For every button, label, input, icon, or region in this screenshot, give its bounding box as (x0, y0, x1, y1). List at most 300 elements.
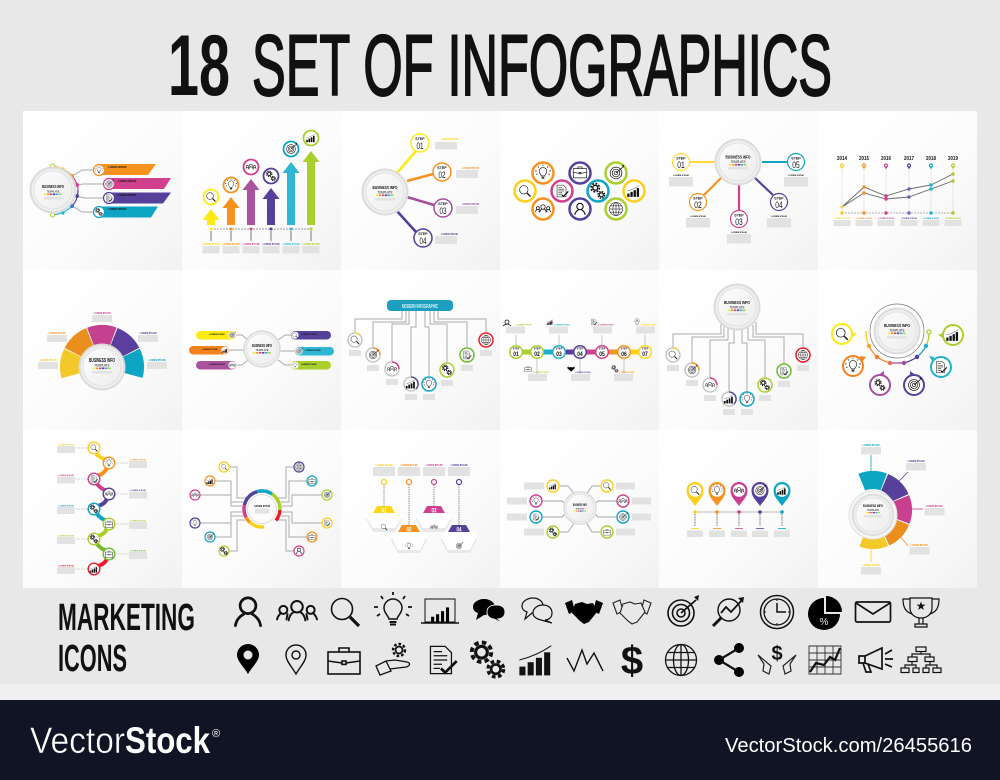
icon: grid chart (809, 646, 841, 674)
step 07: STEP (642, 348, 649, 350)
center disc with ring: TEMPLATE (890, 328, 904, 332)
icon: zigzag line (567, 650, 603, 671)
icon: outline handshake (613, 600, 651, 624)
icon: clock (760, 596, 794, 628)
step 04: 04 (456, 528, 462, 534)
left nodes (507, 480, 559, 538)
panel 11: hub org chart (666, 284, 810, 415)
step 01: STEP (676, 156, 686, 160)
step 04: 04 (577, 352, 583, 358)
step 02 (391, 464, 427, 553)
step 06: LOREM IPSUM (619, 372, 635, 374)
step 02: 02 (534, 352, 540, 358)
step 05: LOREM IPSUM (788, 175, 804, 177)
heading: marketing icons: MARKETING (58, 597, 195, 639)
banner purple (104, 192, 171, 204)
icon: hands with dollar: $ (771, 643, 783, 665)
step 1: LOREM IPSUM (58, 444, 74, 446)
labels: LOREM IPSUM (908, 460, 924, 463)
step 4: LOREM IPSUM (130, 490, 146, 492)
bubble bulb (843, 356, 866, 376)
logo: VectorStock: ® (212, 728, 220, 740)
center disc (362, 168, 408, 216)
panel 2: rising arrows (202, 130, 320, 254)
data points (840, 172, 955, 215)
node gears (440, 363, 454, 386)
panel 3: four steps hub (362, 134, 479, 247)
step 02: LOREM IPSUM (401, 464, 417, 467)
icon: target (610, 165, 624, 179)
step 05 (784, 154, 808, 186)
2018 (922, 156, 940, 226)
pin 1 (686, 482, 704, 537)
logo: VectorStock: Stock (125, 720, 210, 761)
icon: org chart (901, 647, 941, 672)
image id: VectorStock.com/26455616 (725, 735, 972, 757)
heading: marketing icons (58, 597, 195, 680)
icon: trophy: ★ (916, 599, 926, 613)
node search (348, 333, 362, 356)
step 04: 04 (420, 236, 426, 246)
step 03: STEP (734, 214, 744, 218)
right nodes (601, 480, 651, 538)
panel 14: circuit hub (190, 462, 332, 556)
icon: briefcase (573, 167, 587, 178)
segments (60, 325, 144, 409)
logo: VectorStock: Vector (30, 720, 125, 761)
step 01: 01 (382, 508, 387, 514)
icon: gears (472, 642, 504, 677)
banner pink (104, 178, 171, 190)
2019 (944, 156, 962, 226)
icon: team (277, 601, 317, 620)
2017: LOREM IPSUM (901, 218, 917, 220)
2018: 2018 (926, 156, 936, 162)
node doc (460, 348, 474, 371)
icon: share (714, 643, 744, 677)
panel 7: semicircle segments (38, 312, 167, 409)
ring: globe (606, 198, 626, 220)
step 05: LOREM IPSUM (598, 324, 614, 326)
icon: hands with dollar (758, 643, 796, 674)
step 01 (669, 154, 693, 186)
pill green: LOREM IPSUM (301, 364, 317, 366)
panel 4: ring cluster (514, 162, 644, 220)
panel 9: modern infographic org (348, 300, 493, 400)
step 03: 03 (440, 206, 446, 216)
labels: LOREM IPSUM (926, 505, 942, 508)
center disc: BUSINESS INFO (42, 184, 64, 189)
pill navy: LOREM IPSUM (301, 334, 317, 336)
2016: 2016 (881, 156, 891, 162)
icon row 1 (235, 592, 939, 630)
step 04: LOREM IPSUM (451, 464, 467, 467)
connectors (673, 322, 803, 392)
icon: person (575, 203, 585, 214)
2014 (834, 156, 850, 226)
icon: bulb (535, 165, 551, 178)
icon: briefcase (328, 648, 360, 674)
center disc: BUSINESS INFO (726, 154, 751, 160)
link bars (516, 350, 645, 354)
icon: trophy (903, 598, 939, 627)
labels: LOREM IPSUM (94, 312, 110, 315)
step 02 (525, 346, 549, 381)
footer bar (0, 700, 1000, 780)
center disc with ring (870, 304, 924, 358)
center disc with ring: BUSINESS INFO (884, 323, 910, 329)
icon: bars (627, 186, 639, 197)
ring: document (552, 180, 572, 202)
pill teal (295, 347, 334, 356)
center disc: BUSINESS INFO (252, 343, 272, 348)
title (168, 18, 832, 114)
arrow step 6: LOREM IPSUM (303, 243, 319, 246)
center disc: TEMPLATE (94, 364, 110, 368)
icon: magnifier (332, 598, 359, 626)
ring: bulb (532, 162, 554, 184)
banner pink: LOREM IPSUM (118, 179, 136, 183)
icon: outline chat bubbles (522, 598, 552, 623)
step 07 (635, 319, 657, 358)
icon: hand with gear (376, 644, 410, 675)
icon: dollar sign: $ (621, 639, 643, 683)
step 04: LOREM IPSUM (771, 216, 787, 218)
step 01: LOREM IPSUM (441, 138, 458, 141)
step 04 (441, 464, 477, 553)
center disc (243, 330, 281, 368)
panel 8: pills both sides of hub (189, 330, 334, 370)
pill green (291, 361, 331, 370)
ring: gears (588, 180, 608, 202)
labels: LOREM IPSUM (140, 332, 156, 335)
step 06 (612, 346, 635, 381)
step 02: LOREM IPSUM (690, 216, 706, 218)
icon: percent pie: % (820, 617, 829, 628)
step 9: LOREM IPSUM (58, 566, 74, 568)
step 03 (547, 319, 570, 358)
center disc: BUSINESS INFO (573, 503, 587, 507)
node team (703, 378, 717, 401)
pill yellow (196, 331, 236, 340)
pin 3 (730, 482, 748, 537)
node target (366, 348, 380, 371)
step 5: LOREM IPSUM (58, 506, 74, 508)
icon: light bulb (374, 592, 412, 624)
center disc: BUSINESS INFO (863, 503, 883, 508)
bubble target (904, 371, 924, 395)
center disc: TEMPLATE (256, 348, 269, 352)
connectors (355, 311, 486, 376)
icon: solid pin (237, 644, 259, 674)
icon: globe (666, 644, 696, 676)
icon: person (235, 598, 261, 626)
step 02: 02 (438, 170, 446, 180)
heading: marketing icons: ICONS (58, 638, 127, 680)
center disc: TEMPLATE (867, 508, 879, 512)
icon: outline pin (286, 645, 306, 674)
node bars (722, 392, 736, 415)
ring: target (606, 162, 626, 184)
color ring hub (237, 484, 287, 534)
step 04: LOREM IPSUM (441, 233, 458, 236)
2015 (856, 156, 872, 226)
icon: solid chat bubbles (473, 599, 505, 624)
icon: gears (591, 184, 605, 198)
connectors (543, 486, 616, 532)
pin 4 (752, 482, 768, 537)
pill orange: LOREM IPSUM (202, 349, 218, 351)
arrow step 5: LOREM IPSUM (283, 243, 299, 246)
panel 5: five steps hub (669, 138, 808, 244)
step 01: LOREM IPSUM (516, 324, 532, 326)
step 03: 03 (735, 217, 743, 227)
icon row 2 (237, 639, 941, 683)
step 01 (503, 320, 532, 358)
step 7: LOREM IPSUM (58, 536, 74, 538)
arc of dots (50, 164, 79, 217)
callout lines (871, 455, 923, 562)
line series (842, 174, 953, 207)
icon: percent pie (808, 596, 842, 630)
step 04 (414, 229, 458, 247)
step 03: 03 (432, 508, 437, 514)
step 05: 05 (599, 352, 605, 358)
node bars (404, 377, 418, 400)
pill teal: LOREM IPSUM (305, 350, 321, 352)
step 01: 01 (416, 141, 424, 151)
ring: briefcase (570, 162, 590, 184)
panel 17: map pins timeline (686, 482, 790, 537)
step 2: LOREM IPSUM (130, 460, 146, 462)
node bulb (422, 377, 436, 400)
connectors (200, 467, 322, 551)
ring: team (532, 198, 554, 220)
pill purple: LOREM IPSUM (209, 364, 225, 366)
step 04: STEP (577, 348, 584, 350)
center disc: BUSINESS INFO (372, 185, 398, 191)
bubble hand (870, 371, 890, 395)
panel 16: hub with eight nodes (507, 480, 651, 538)
step 02: STEP (534, 348, 541, 350)
pill yellow: LOREM IPSUM (209, 334, 225, 336)
step 05: 05 (792, 160, 800, 170)
step 02: LOREM IPSUM (462, 167, 479, 170)
step 04: STEP (418, 232, 428, 236)
panel 10: seven step chain (503, 319, 657, 381)
node gears (758, 378, 772, 401)
step 05 (592, 319, 614, 358)
banner orange: LOREM IPSUM (108, 165, 126, 169)
step 3: LOREM IPSUM (58, 475, 74, 477)
step 04 (567, 346, 591, 381)
icon: team (535, 205, 551, 212)
center disc: BUSINESS INFO (724, 300, 750, 306)
step 03: 03 (556, 352, 562, 358)
panel 12: bubbles around arc (832, 304, 963, 395)
node target (685, 363, 699, 386)
node globe (796, 348, 810, 371)
step 07: LOREM IPSUM (641, 324, 657, 326)
panel 18: half ring segments (834, 444, 944, 574)
center disc (30, 166, 76, 214)
step 04: 04 (775, 200, 783, 210)
icon: globe (609, 202, 623, 216)
bubble search (832, 324, 857, 344)
segments (834, 471, 912, 549)
bubble bars (938, 325, 963, 345)
arrow step 1: LOREM IPSUM (203, 243, 219, 246)
step 6: LOREM IPSUM (130, 520, 146, 522)
step 04: STEP (774, 196, 784, 200)
icon: megaphone (859, 648, 893, 672)
step 06: STEP (621, 348, 628, 350)
step 06: 06 (621, 352, 627, 358)
2016: LOREM IPSUM (878, 218, 894, 220)
2017: 2017 (904, 156, 914, 162)
icon: solid handshake (565, 600, 603, 624)
labels: LOREM IPSUM (863, 444, 879, 447)
pill navy (291, 331, 331, 340)
2016 (878, 156, 894, 226)
step 01 (366, 464, 402, 532)
2015: 2015 (859, 156, 869, 162)
step 03: LOREM IPSUM (554, 324, 570, 326)
step 04: LOREM IPSUM (575, 372, 591, 374)
center disc (714, 284, 760, 330)
icon: target (668, 595, 699, 626)
labels: LOREM IPSUM (149, 359, 165, 362)
2018: LOREM IPSUM (923, 218, 939, 220)
panel 13: vertical snake (57, 442, 147, 575)
step 03 (416, 464, 452, 532)
step 02: 02 (694, 200, 702, 210)
pill orange (189, 346, 229, 354)
arrow step 3: LOREM IPSUM (243, 243, 259, 246)
step 02 (686, 194, 710, 228)
2019: 2019 (948, 156, 958, 162)
2019: LOREM IPSUM (945, 218, 961, 220)
banner teal (94, 206, 158, 218)
step 01: STEP (415, 137, 425, 141)
bubble doc (929, 356, 951, 377)
icon: rising bars (519, 646, 551, 675)
icon: laptop chart (421, 599, 459, 623)
labels (861, 444, 944, 574)
footer band (0, 684, 1000, 700)
center disc (849, 491, 897, 539)
header banner: MODERN INFOGRAPHIC (402, 304, 438, 310)
step 01: 01 (677, 160, 685, 170)
center disc (78, 344, 126, 390)
step 02: LOREM IPSUM (533, 372, 549, 374)
step 02: STEP (437, 166, 447, 170)
center disc: BUSINESS INFO (89, 358, 115, 364)
2015: LOREM IPSUM (856, 218, 872, 220)
labels: LOREM IPSUM (40, 359, 56, 362)
logo: VectorStock (30, 720, 220, 761)
panel 6: timeline line chart (834, 156, 962, 226)
center disc: TEMPLATE (46, 190, 60, 194)
arrow step 4: LOREM IPSUM (263, 243, 279, 246)
node bulb (740, 392, 754, 415)
step 03: LOREM IPSUM (462, 203, 479, 206)
banner teal: LOREM IPSUM (108, 207, 126, 211)
ring: person (570, 198, 590, 220)
pin 5 (774, 482, 790, 537)
arrow step 2: LOREM IPSUM (223, 243, 239, 246)
ring: bars (624, 180, 644, 202)
2017 (900, 156, 918, 226)
center disc: TEMPLATE (730, 160, 746, 164)
center disc (714, 138, 762, 186)
icon: growth magnifier (713, 597, 744, 626)
nodes right (294, 462, 332, 556)
step 01: LOREM IPSUM (376, 464, 392, 467)
icon: document (557, 185, 568, 197)
banner orange (94, 164, 156, 176)
pill purple (196, 361, 236, 370)
panel backgrounds grid (23, 111, 977, 588)
step 03: STEP (438, 202, 448, 206)
labels: LOREM IPSUM (863, 564, 879, 567)
labels: LOREM IPSUM (911, 544, 927, 547)
step 02: STEP (693, 196, 703, 200)
step 01: LOREM IPSUM (673, 175, 689, 177)
step 03: STEP (556, 348, 563, 350)
ring: search (514, 180, 536, 202)
step 05: STEP (791, 156, 801, 160)
labels (38, 312, 167, 369)
2014: 2014 (837, 156, 847, 162)
nodes left (190, 462, 229, 556)
center disc: TEMPLATE (576, 508, 585, 510)
arc (865, 330, 931, 365)
snake links (96, 454, 107, 566)
panel 1: banners with arc (30, 164, 171, 218)
icon: envelope (856, 602, 890, 622)
step 04 (767, 194, 791, 228)
panel 15: hexagon steps (366, 464, 477, 553)
center disc (563, 491, 597, 525)
2014: LOREM IPSUM (834, 218, 850, 220)
step 01: STEP (513, 348, 520, 350)
step 03: LOREM IPSUM (426, 464, 442, 467)
center disc: TEMPLATE (378, 190, 392, 194)
node doc (777, 364, 791, 387)
node search (666, 348, 680, 371)
pin 2 (708, 482, 726, 537)
step 01 (411, 134, 458, 152)
step 02: 02 (406, 528, 412, 534)
node team (385, 362, 399, 385)
color ring hub: LOREM IPSUM (254, 504, 270, 508)
icon: search (520, 186, 531, 197)
node globe (479, 333, 493, 356)
labels: LOREM IPSUM (49, 332, 65, 335)
step 01: 01 (513, 352, 519, 358)
step 03 (727, 210, 751, 244)
banner purple: LOREM IPSUM (118, 193, 136, 197)
step 07: 07 (642, 352, 648, 358)
title: 18 (168, 18, 230, 114)
header banner (387, 300, 453, 311)
center disc: TEMPLATE (730, 306, 744, 310)
step 02 (433, 163, 479, 181)
step 05: STEP (599, 348, 606, 350)
step 8: LOREM IPSUM (130, 550, 146, 552)
step 03 (434, 199, 479, 217)
